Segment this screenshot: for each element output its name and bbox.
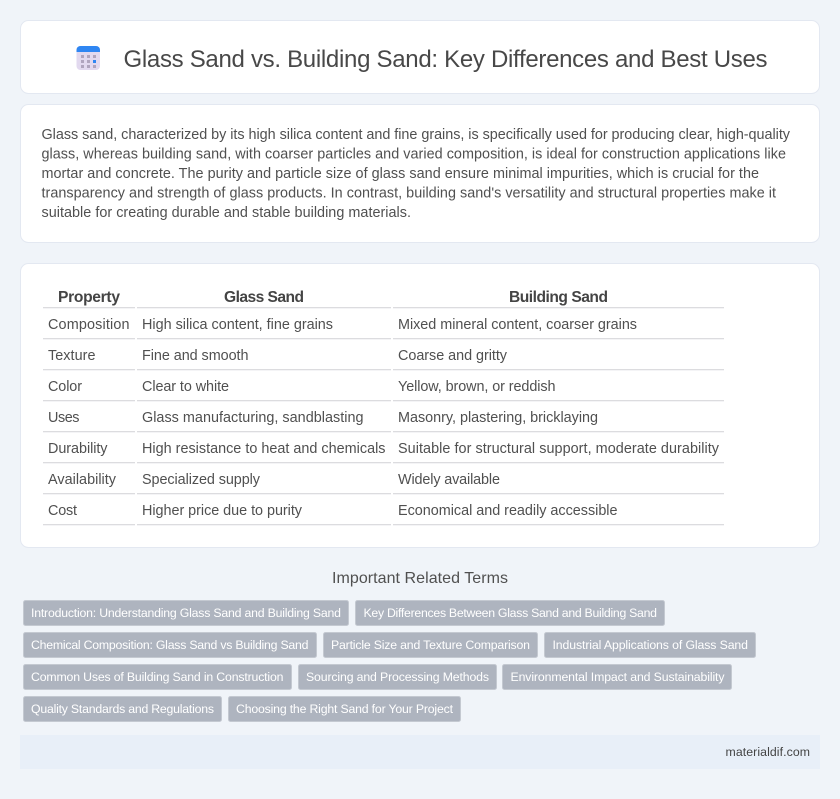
tag: [24, 696, 222, 722]
tag: Environmental Impact and Sustainability: [510, 670, 725, 684]
panel: header: [20, 20, 820, 94]
text block: intro: glass, whereas building sand, with coarser particles and varied composition, is ideal for construction applications like: [42, 146, 786, 162]
row: texture: Coarse and gritty: [398, 348, 508, 364]
row: cost: [48, 503, 618, 519]
tag: [24, 600, 348, 626]
tag: Common Uses of Building Sand in Construction: [31, 670, 284, 684]
panel: intro paragraph: [20, 104, 820, 242]
table header: Building Sand: [509, 289, 608, 306]
row: availability: Availability: [48, 472, 117, 488]
row: color: Yellow, brown, or reddish: [398, 379, 556, 395]
row: availability: [48, 472, 500, 488]
tag: [324, 632, 538, 658]
text block: intro: [42, 127, 791, 221]
row: durability: Durability: [48, 441, 108, 457]
row: uses: Masonry, plastering, bricklaying: [398, 410, 598, 426]
row: texture: Fine and smooth: [142, 348, 248, 364]
row: composition: [48, 317, 637, 333]
table header: Property: [58, 289, 120, 306]
tag: Sourcing and Processing Methods: [306, 670, 489, 684]
tag: Choosing the Right Sand for Your Project: [236, 702, 454, 716]
row: availability: Widely available: [398, 472, 500, 488]
row: composition: High silica content, fine grains: [142, 317, 333, 333]
tag: Industrial Applications of Glass Sand: [552, 638, 748, 652]
row: color: [48, 379, 556, 395]
row: uses: Glass manufacturing, sandblasting: [142, 410, 364, 426]
row: uses: Uses: [48, 410, 80, 426]
tag: [24, 632, 316, 658]
table header: [58, 289, 608, 306]
table header: Glass Sand: [224, 289, 304, 306]
row: cost: Economical and readily accessible: [398, 503, 618, 519]
text block: intro: mortar and concrete. The purity and particle size of glass sand ensure minimal impurities, which is crucial for the: [42, 166, 759, 182]
text block: intro: transparency and strength of glass products. In contrast, building sand's versatility and structural properties make it: [42, 186, 776, 202]
row: texture: Texture: [48, 348, 96, 364]
row: color: Color: [48, 379, 82, 395]
row: cost: Cost: [48, 503, 77, 519]
row: durability: High resistance to heat and chemicals: [142, 441, 386, 457]
row: composition: Composition: [48, 317, 130, 333]
panel: comparison table: [20, 264, 820, 548]
text block: intro: Glass sand, characterized by its high silica content and fine grains, is specifically used for producing clear, high-quality: [42, 127, 791, 143]
tags: related terms: [24, 600, 756, 722]
tag: Chemical Composition: Glass Sand vs Building Sand: [31, 638, 309, 652]
icon: calendar: [76, 46, 100, 70]
row: durability: Suitable for structural support, moderate durability: [398, 441, 720, 457]
tag: Particle Size and Texture Comparison: [331, 638, 530, 652]
tag: [298, 664, 496, 690]
footer source text: materialdif.com: [726, 745, 810, 759]
tag: [228, 696, 460, 722]
footer: [20, 735, 820, 769]
row: availability: Specialized supply: [142, 472, 261, 488]
tag: [24, 664, 292, 690]
text block: intro: suitable for creating durable and stable building materials.: [42, 205, 411, 221]
row: texture: [48, 348, 508, 364]
tag: [544, 632, 756, 658]
tag: [356, 600, 664, 626]
row: durability: [48, 441, 720, 457]
row: cost: Higher price due to purity: [142, 503, 303, 519]
tag: [502, 664, 732, 690]
tag: Key Differences Between Glass Sand and Building Sand: [364, 606, 657, 620]
heading: related terms: Important Related Terms: [332, 570, 508, 587]
row: uses: [48, 410, 598, 426]
tag: Quality Standards and Regulations: [31, 702, 214, 716]
row: composition: Mixed mineral content, coarser grains: [398, 317, 637, 333]
row: color: Clear to white: [142, 379, 229, 395]
title: Glass Sand vs. Building Sand: Key Differences and Best Uses: [124, 46, 768, 73]
tag: Introduction: Understanding Glass Sand and Building Sand: [31, 606, 341, 620]
